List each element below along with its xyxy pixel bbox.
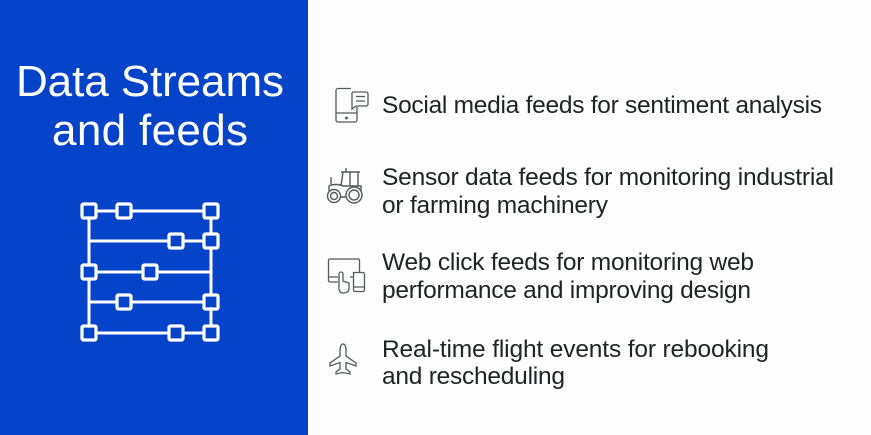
text: flight events [382, 336, 769, 390]
text: flight events: Real-time flight events for rebooking [382, 336, 769, 363]
title [16, 57, 284, 155]
title: Data Streams [16, 57, 284, 106]
panel: blue sidebar [0, 0, 308, 435]
text: social media: Social media feeds for sentiment analysis [382, 92, 822, 119]
icon: phone with speech bubble [336, 88, 368, 122]
text: flight events: and rescheduling [382, 363, 565, 390]
text: web click: Web click feeds for monitoring web [382, 249, 754, 276]
title: and feeds [52, 106, 248, 155]
icon: airplane [330, 344, 356, 374]
text: web click: performance and improving design [382, 277, 751, 304]
text: sensor data: or farming machinery [382, 192, 609, 219]
text: web click [382, 249, 754, 304]
text: sensor data: Sensor data feeds for monitoring industrial [382, 164, 834, 191]
text: sensor data [382, 164, 834, 219]
icon: tractor [328, 168, 362, 203]
icon: devices with touch hand [328, 259, 364, 293]
icon: data stream grid [82, 204, 218, 340]
